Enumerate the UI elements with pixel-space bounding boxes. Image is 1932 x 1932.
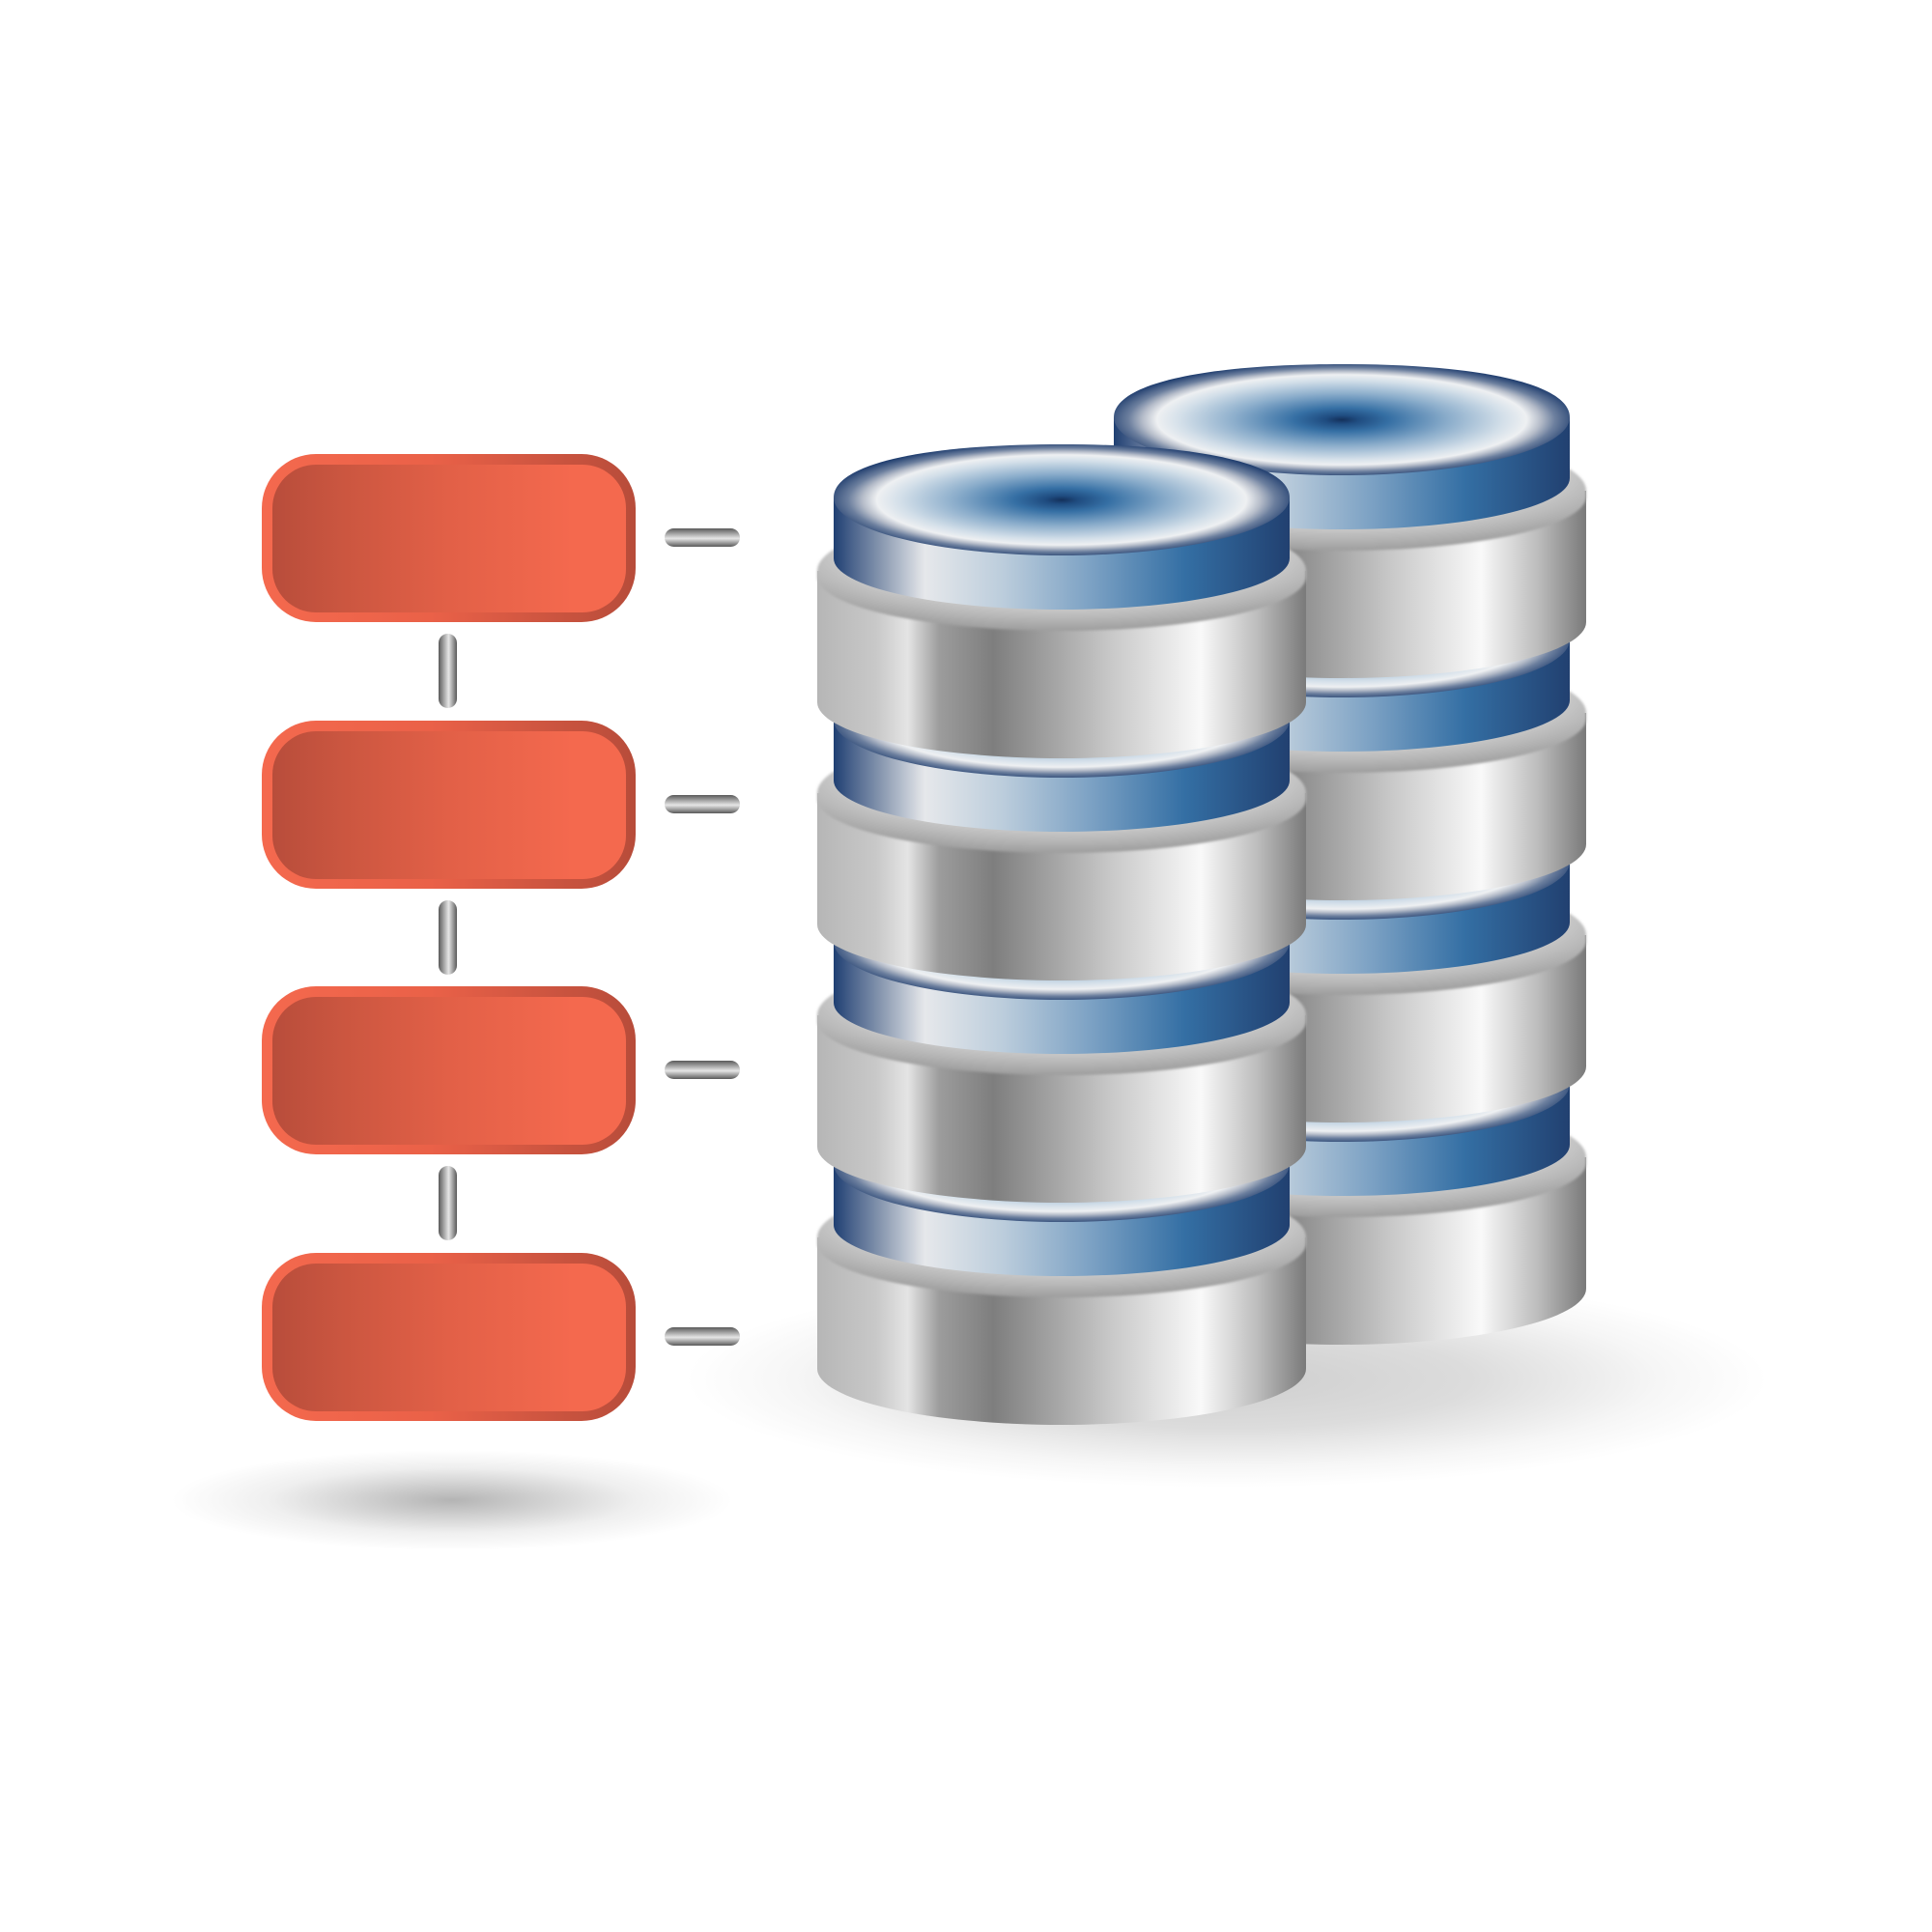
shadow under boxes: [172, 1450, 732, 1550]
box 3: [262, 986, 636, 1154]
box 4: [262, 1253, 636, 1421]
panel: box column: [262, 454, 636, 1421]
database stack: front: [817, 444, 1306, 1425]
vertical connectors between boxes: [439, 634, 457, 1240]
box 1: [262, 454, 636, 622]
database stack: back: [1097, 364, 1586, 1345]
horizontal connectors toward database: [665, 528, 740, 1346]
box 2: [262, 721, 636, 889]
shadow under database stacks: [686, 1271, 1768, 1488]
